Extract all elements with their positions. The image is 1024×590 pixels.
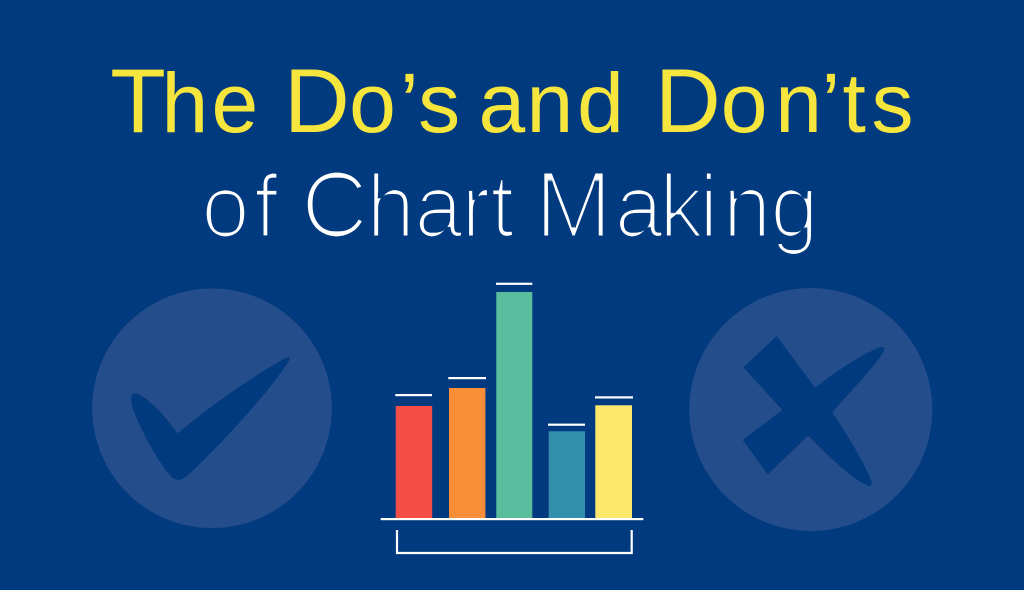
icon: cross mark in circle <box>689 288 932 531</box>
title: The Do's and Don'ts: on’ts <box>721 56 914 150</box>
chart baseline <box>381 518 643 520</box>
bar: orange <box>448 377 486 518</box>
bar: teal <box>548 424 585 518</box>
title: The Do's and Don'ts: and <box>478 56 624 150</box>
subtitle: of Chart Making: of <box>201 157 279 256</box>
title: The Do's and Don'ts: o’s <box>349 56 460 150</box>
subtitle: of Chart Making: C <box>301 153 368 257</box>
title: The Do's and Don'ts: T <box>110 51 166 152</box>
title: The Do's and Don'ts: he <box>162 56 258 150</box>
bar: yellow <box>595 396 633 518</box>
subtitle: of Chart Making: aking <box>614 157 819 256</box>
chart bracket <box>397 530 632 553</box>
bar chart <box>381 283 643 553</box>
subtitle: of Chart Making: M <box>535 153 612 257</box>
icon: check mark in circle <box>92 288 332 528</box>
title: The Do's and Don'ts: D <box>284 51 350 152</box>
subtitle: of Chart Making: hart <box>366 157 514 256</box>
bar: green <box>496 283 532 518</box>
bar: red <box>395 394 432 518</box>
title: The Do's and Don'ts: D <box>655 51 721 152</box>
